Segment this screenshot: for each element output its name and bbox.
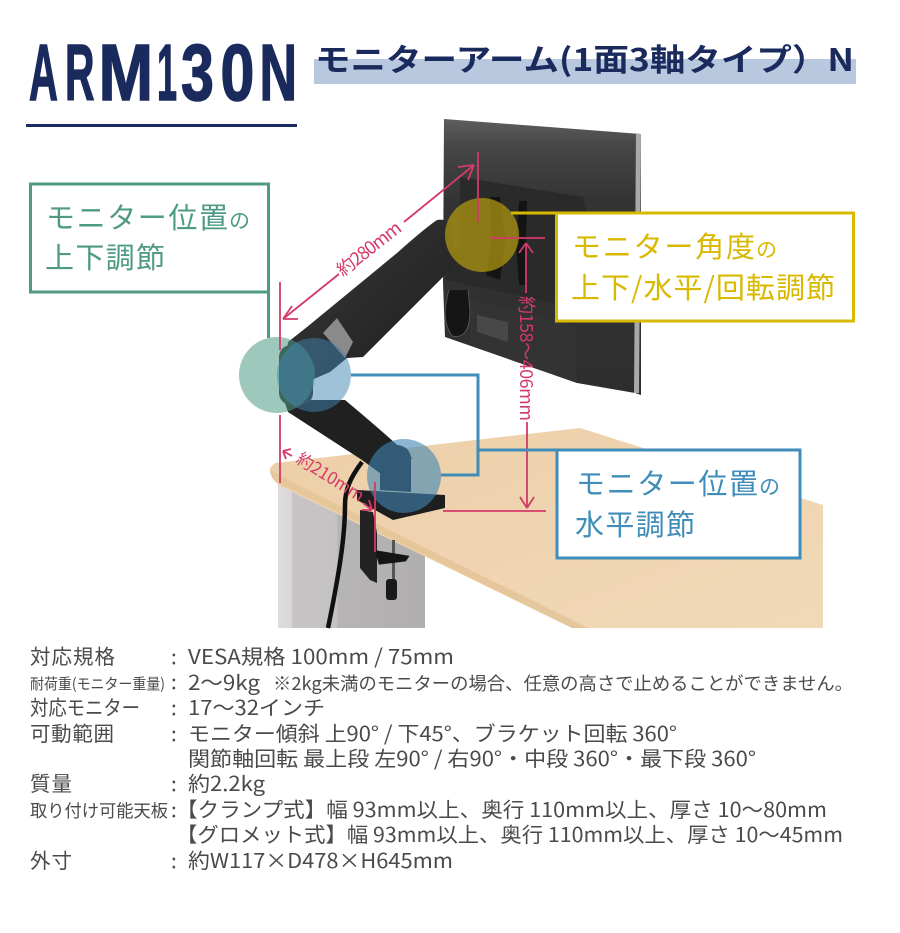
title: ARM130N: M (98, 28, 153, 117)
row: mountable desk: : (171, 793, 177, 823)
desk front edge (270, 470, 588, 628)
monitor rear inset (477, 315, 508, 342)
highlight circle: monitor angle (445, 198, 519, 272)
title: ARM130N: 3 (181, 27, 214, 117)
connector (511, 212, 557, 214)
callout text line 2: 水平調節 (575, 502, 695, 544)
callout text line 2: 上下/水平/回転調節 (571, 265, 835, 307)
title: ARM130N: 0 (220, 29, 254, 118)
row: dimensions (30, 844, 453, 874)
lower arm (284, 400, 412, 482)
row: weight: 約2.2kg (188, 767, 265, 797)
row: range of motion: 関節軸回転 最上段 左90° / 右90°・中段 360°・最下段 360° (188, 742, 756, 772)
row: dimensions: : (171, 844, 177, 874)
joint (279, 345, 313, 405)
callout box (30, 184, 268, 292)
callout: horizontal position (351, 375, 800, 558)
row: load capacity: : (171, 665, 177, 695)
row: VESA: 対応規格 (30, 640, 116, 670)
row: weight: : (171, 767, 177, 797)
monitor back panel ridge (445, 177, 586, 310)
title: ARM130N: 1 (157, 29, 177, 118)
desk top (270, 428, 823, 628)
desk leg (278, 483, 425, 628)
cable loop (445, 290, 470, 336)
row: dimensions: 外寸 (30, 844, 72, 874)
VESA bracket right strip (516, 201, 527, 285)
dimension: 210mm (280, 415, 375, 552)
highlight circle: base joint (367, 439, 441, 513)
row: supported monitor: : (171, 691, 177, 721)
row: range of motion: モニター傾斜 上90° / 下45°、ブラケット回転 360° (188, 717, 677, 747)
clamp bracket (377, 552, 407, 563)
row: supported monitor (30, 691, 325, 721)
particle: の (756, 234, 777, 264)
callout: vertical position (30, 184, 268, 338)
upper arm (285, 220, 457, 385)
highlight circle: horizontal joint (277, 338, 351, 412)
clamp screw (392, 540, 395, 580)
title: ARM130N (29, 27, 297, 118)
row: VESA: VESA規格 100mm / 75mm (188, 640, 454, 670)
row: VESA (30, 640, 454, 670)
monitor back (443, 119, 641, 395)
row: mountable desk (30, 793, 843, 848)
row: load capacity: ※2kg未満のモニターの場合、任意の高さで止めることができません。 (273, 670, 853, 696)
label: 280mm: 約280mm (331, 214, 407, 282)
callout text line 2: 上下調節 (45, 235, 165, 277)
row: range of motion: : (171, 717, 177, 747)
particle: の (759, 471, 780, 501)
row: supported monitor: 17～32インチ (188, 691, 325, 721)
connector (267, 292, 270, 338)
connector (351, 375, 557, 475)
title underline (26, 124, 297, 127)
callout box (557, 450, 800, 558)
VESA bracket left strip (486, 197, 506, 280)
callout: monitor angle (511, 213, 854, 321)
row: load capacity: 2～9kg (188, 666, 260, 696)
monitor lower panel (470, 300, 577, 383)
row: dimensions: 約W117×D478×H645mm (188, 844, 453, 874)
row: weight: 質量 (30, 767, 72, 797)
monitor edge (634, 134, 641, 393)
row: load capacity: 耐荷重(モニター重量) (30, 673, 165, 694)
cable (328, 462, 362, 628)
product photo: desk, monitor and arm (270, 119, 823, 628)
upper arm highlight (323, 318, 353, 358)
row: range of motion: 可動範囲 (30, 717, 114, 747)
particle: の (229, 205, 250, 235)
row: supported monitor: 対応モニター (30, 691, 140, 721)
callout box (556, 213, 854, 321)
clamp plate (360, 510, 377, 583)
label: 158-406mm: 約158～406mm (514, 296, 540, 421)
highlight circle: vertical position (239, 337, 315, 413)
clamp knob (386, 579, 397, 600)
callout text line 1: モニター位置 (576, 461, 758, 503)
title: ARM130N: R (65, 29, 94, 118)
title: ARM130N: A (29, 29, 58, 118)
row: load capacity (30, 665, 853, 696)
subtitle highlight bar (314, 59, 856, 84)
subtitle: モニターアーム(1面3軸タイプ）N (315, 35, 854, 80)
specification list (30, 640, 853, 874)
dimension: 280mm (280, 152, 478, 350)
row: mountable desk: 【クランプ式】幅 93mm以上、奥行 110mm以上、厚さ 10～80mm (176, 793, 827, 823)
callout text line 1: モニター角度 (572, 224, 755, 266)
row: mountable desk: 【グロメット式】幅 93mm以上、奥行 110mm以上、厚さ 10～45mm (176, 818, 843, 848)
row: mountable desk: 取り付け可能天板 (30, 798, 168, 823)
label: 210mm: 約210mm (292, 445, 370, 507)
row: range of motion (30, 717, 756, 772)
title: ARM130N: N (260, 29, 297, 118)
dimension: 158-406mm (443, 238, 546, 511)
column (380, 445, 411, 492)
callout text line 1: モニター位置 (46, 195, 228, 237)
clamp base (357, 490, 445, 520)
row: VESA: : (171, 640, 177, 670)
row: weight (30, 767, 265, 797)
